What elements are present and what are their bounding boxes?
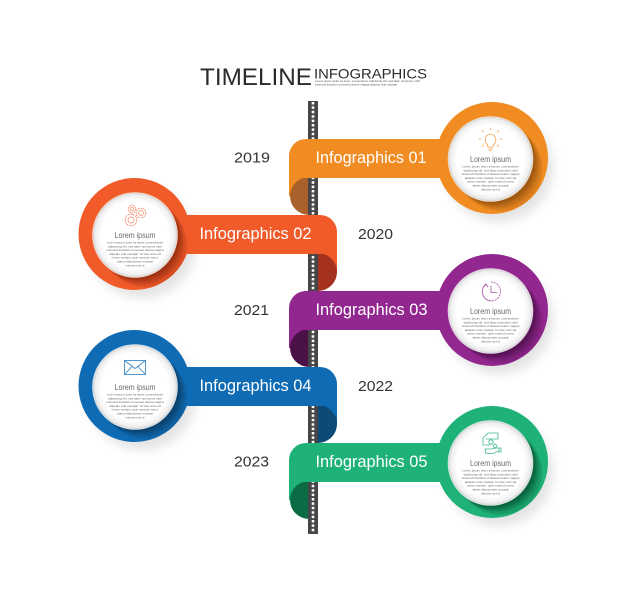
- body text 01: minim veniam, quis nostrud exerci: [467, 180, 514, 184]
- title: INFOGRAPHICS: [314, 66, 427, 82]
- body text 02: [106, 240, 164, 267]
- ribbon 01: [289, 139, 450, 178]
- body text 03: aliquam erat volutpat. Ut wisi enim ad: [465, 328, 516, 332]
- ring 01: [436, 102, 548, 214]
- title: [200, 64, 427, 91]
- body text 04: adipiscing elit, sed diam nonummy nibh: [108, 396, 162, 400]
- ribbon 02: [175, 215, 337, 254]
- body text 01: tation ullamcorper suscipit: [473, 184, 509, 188]
- ring 02: [78, 178, 190, 290]
- body text 01: euismod tincidunt ut laoreet dolore magna: [462, 172, 520, 176]
- plate 03: [448, 268, 533, 354]
- year 2022: 2022: [358, 379, 393, 395]
- body text 02: lobortis nisl ut: [126, 263, 145, 267]
- panel: infographics 04: [78, 330, 337, 450]
- ribbon 05: [289, 443, 450, 482]
- body text 05: tation ullamcorper suscipit: [473, 488, 509, 492]
- ribbon label 04: Infographics 04: [200, 376, 312, 395]
- body text 04: euismod tincidunt ut laoreet dolore magna: [106, 400, 164, 404]
- body text 04: aliquam erat volutpat. Ut wisi enim ad: [109, 404, 161, 408]
- heading 03: Lorem ipsum: [470, 306, 511, 316]
- body text 02: adipiscing elit, sed diam nonummy nibh: [108, 244, 162, 248]
- body text 02: minim veniam, quis nostrud exerci: [112, 256, 159, 260]
- body text 01: Lorem ipsum dolor sit amet, consectetuer: [462, 164, 519, 168]
- fold: ribbon 01 underside: [289, 177, 309, 215]
- ribbon label 05: Infographics 05: [316, 452, 428, 471]
- ring 03: [436, 254, 548, 366]
- body text 04: minim veniam, quis nostrud exerci: [112, 408, 159, 412]
- plate 04: [92, 344, 178, 430]
- body text 01: aliquam erat volutpat. Ut wisi enim ad: [465, 176, 516, 180]
- ribbon label 03: Infographics 03: [316, 300, 428, 319]
- body text 02: tation ullamcorper suscipit: [117, 260, 153, 264]
- body text 01: [462, 164, 520, 191]
- title: TIMELINE: [200, 64, 312, 91]
- body text 05: [462, 468, 520, 495]
- year 2019: 2019: [234, 150, 270, 166]
- body text 03: tation ullamcorper suscipit: [473, 336, 509, 340]
- title: Lorem ipsum dolor sit amet, consectetuer adipiscing elit, sed diam nonummy nibh: [315, 79, 420, 83]
- fold: ribbon 03 underside: [289, 329, 309, 367]
- title: euismod tincidunt ut laoreet dolore magna aliquam erat volutpat: [315, 82, 397, 86]
- body text 04: Lorem ipsum dolor sit amet, consectetuer: [107, 392, 163, 396]
- heading 04: Lorem ipsum: [114, 382, 156, 392]
- body text 02: aliquam erat volutpat. Ut wisi enim ad: [109, 252, 161, 256]
- shadow crescent 02: [106, 206, 187, 287]
- body text 05: lobortis nisl ut: [481, 491, 500, 495]
- body text 05: Lorem ipsum dolor sit amet, consectetuer: [462, 468, 519, 472]
- body text 05: minim veniam, quis nostrud exerci: [467, 484, 514, 488]
- body text 05: euismod tincidunt ut laoreet dolore magna: [462, 476, 520, 480]
- timeline infographic: [78, 68, 556, 534]
- ribbon label 02: Infographics 02: [200, 224, 312, 243]
- year 2021: 2021: [234, 303, 269, 319]
- body text 01: lobortis nisl ut: [481, 187, 500, 191]
- body text 04: [106, 392, 164, 419]
- body text 03: Lorem ipsum dolor sit amet, consectetuer: [462, 316, 519, 320]
- road: [308, 101, 318, 534]
- ribbon 03: [289, 291, 450, 330]
- body text 03: lobortis nisl ut: [481, 339, 500, 343]
- shadow crescent 05: [462, 434, 542, 515]
- ribbon 04: [175, 367, 337, 406]
- fold: ribbon 05 underside: [289, 481, 309, 519]
- year 2020: 2020: [358, 227, 393, 243]
- panel: infographics 03: [289, 254, 553, 374]
- heading 01: Lorem ipsum: [470, 154, 511, 164]
- panel: infographics 05: [289, 406, 553, 526]
- ring 05: [436, 406, 548, 518]
- body text 02: euismod tincidunt ut laoreet dolore magna: [106, 248, 164, 252]
- heading 02: Lorem ipsum: [114, 230, 156, 240]
- body text 03: minim veniam, quis nostrud exerci: [467, 332, 514, 336]
- icon: gears: [125, 205, 146, 226]
- body text 02: Lorem ipsum dolor sit amet, consectetuer: [107, 240, 163, 244]
- shadow crescent 04: [106, 359, 186, 438]
- icon: clock: [482, 282, 500, 301]
- fold: ribbon 04 underside: [317, 405, 337, 443]
- plate 01: [448, 116, 533, 202]
- heading 05: Lorem ipsum: [470, 458, 511, 468]
- body text 05: adipiscing elit, sed diam nonummy nibh: [464, 472, 518, 476]
- panel: infographics 02: [78, 178, 337, 298]
- icon: hands and money: [483, 433, 501, 454]
- plate 02: [92, 192, 178, 278]
- body text 01: adipiscing elit, sed diam nonummy nibh: [464, 168, 518, 172]
- icon: envelope: [124, 360, 146, 374]
- body text 03: adipiscing elit, sed diam nonummy nibh: [464, 320, 518, 324]
- panel: infographics 01: [289, 102, 553, 222]
- shadow crescent 01: [462, 130, 542, 211]
- plate 05: [448, 420, 533, 506]
- fold: ribbon 02 underside: [317, 253, 337, 291]
- body text 03: [462, 316, 520, 343]
- body text 04: lobortis nisl ut: [126, 415, 145, 419]
- gear hubs: [128, 207, 143, 223]
- body text 03: euismod tincidunt ut laoreet dolore magna: [462, 324, 520, 328]
- body text 04: tation ullamcorper suscipit: [117, 412, 153, 416]
- shadow crescent 03: [463, 283, 542, 362]
- body text 05: aliquam erat volutpat. Ut wisi enim ad: [465, 480, 516, 484]
- year 2023: 2023: [234, 454, 269, 470]
- ribbon label 01: Infographics 01: [316, 148, 426, 167]
- icon: light bulb: [479, 128, 502, 150]
- ring 04: [78, 330, 190, 442]
